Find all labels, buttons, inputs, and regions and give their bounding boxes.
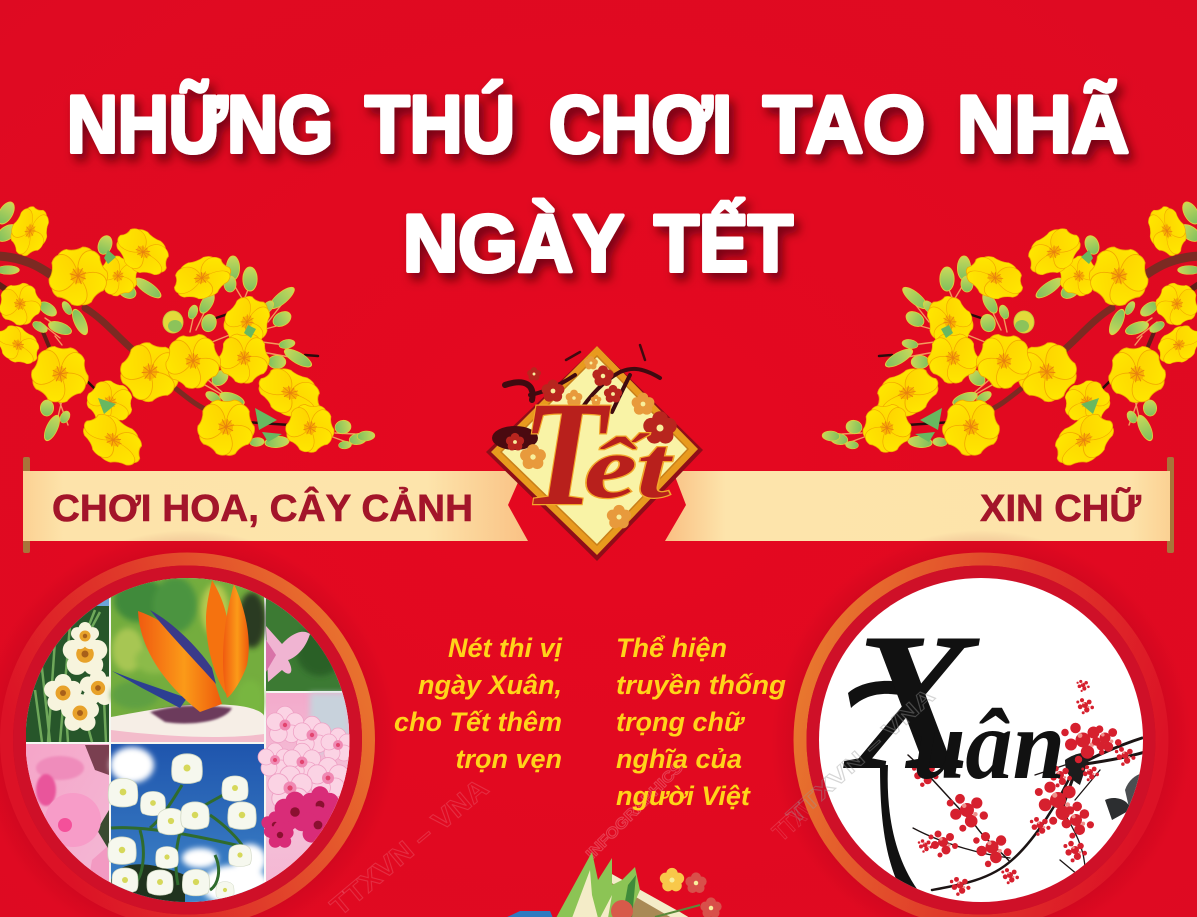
plum branches on emblem [492,345,660,450]
caption: right: người Việt [616,781,751,811]
ribbon: right [665,457,1174,553]
buds [0,199,375,449]
panel: flower photo circle [0,530,398,917]
ribbon label: right: XIN CHỮ [980,486,1141,530]
title [67,79,1129,289]
photo: pink mallow [26,744,109,882]
watermark: infographics: INFOGRAPHICS [583,759,687,863]
title line 2: NGÀY [403,199,624,289]
plum branches [908,680,1150,896]
caption: left: Nét thi vị [448,633,562,663]
title line 1: THÚ [365,79,515,170]
caption: left: cho Tết thêm [394,707,562,737]
ribbon label: left: CHƠI HOA, CÂY CẢNH [52,486,473,530]
Tết diamond emblem [486,345,703,561]
ribbon: left [23,457,528,553]
caption: right: truyền thống [616,670,787,700]
panel: calligraphy circle [771,530,1191,917]
title line 1: NHỮNG [67,79,333,170]
caption: right: Thể hiện [616,633,727,663]
apricot blossom branch left [0,199,375,480]
watermark: TTXVN right: TTXVN [767,786,831,846]
apricot blossom branch right [822,199,1197,480]
photo: lily of the valley [108,744,269,905]
title line 2: TẾT [654,198,793,289]
calligraphy: X: X [843,593,981,812]
caption: right: trọng chữ [616,707,746,737]
caption: left: ngày Xuân, [418,670,562,700]
blossoms [0,202,338,480]
calligraphy: uân: uân [913,689,1065,800]
emblem lettering: ết: ết [584,420,673,517]
calligraphy flourish strokes [848,680,917,889]
caption: right: nghĩa của [616,744,742,774]
title line 1: TAO [763,80,925,170]
flower photo collage [26,577,355,905]
photo: narcissus [26,598,111,742]
rice cake decoration (bottom) [505,852,722,917]
watermark on calligraphy: TTXVN – VNA [782,683,940,829]
caption: left [394,633,562,774]
emblem lettering: T: T [522,371,611,537]
title line 1: NHÃ [957,79,1129,170]
photo: pink flower on green [266,598,342,691]
caption: right [616,633,787,811]
caption: left: trọn vẹn [455,744,562,774]
photo: pink cherry blossoms [258,688,350,882]
title line 1: CHƠI [549,80,732,170]
photo: bird of paradise [111,577,266,742]
